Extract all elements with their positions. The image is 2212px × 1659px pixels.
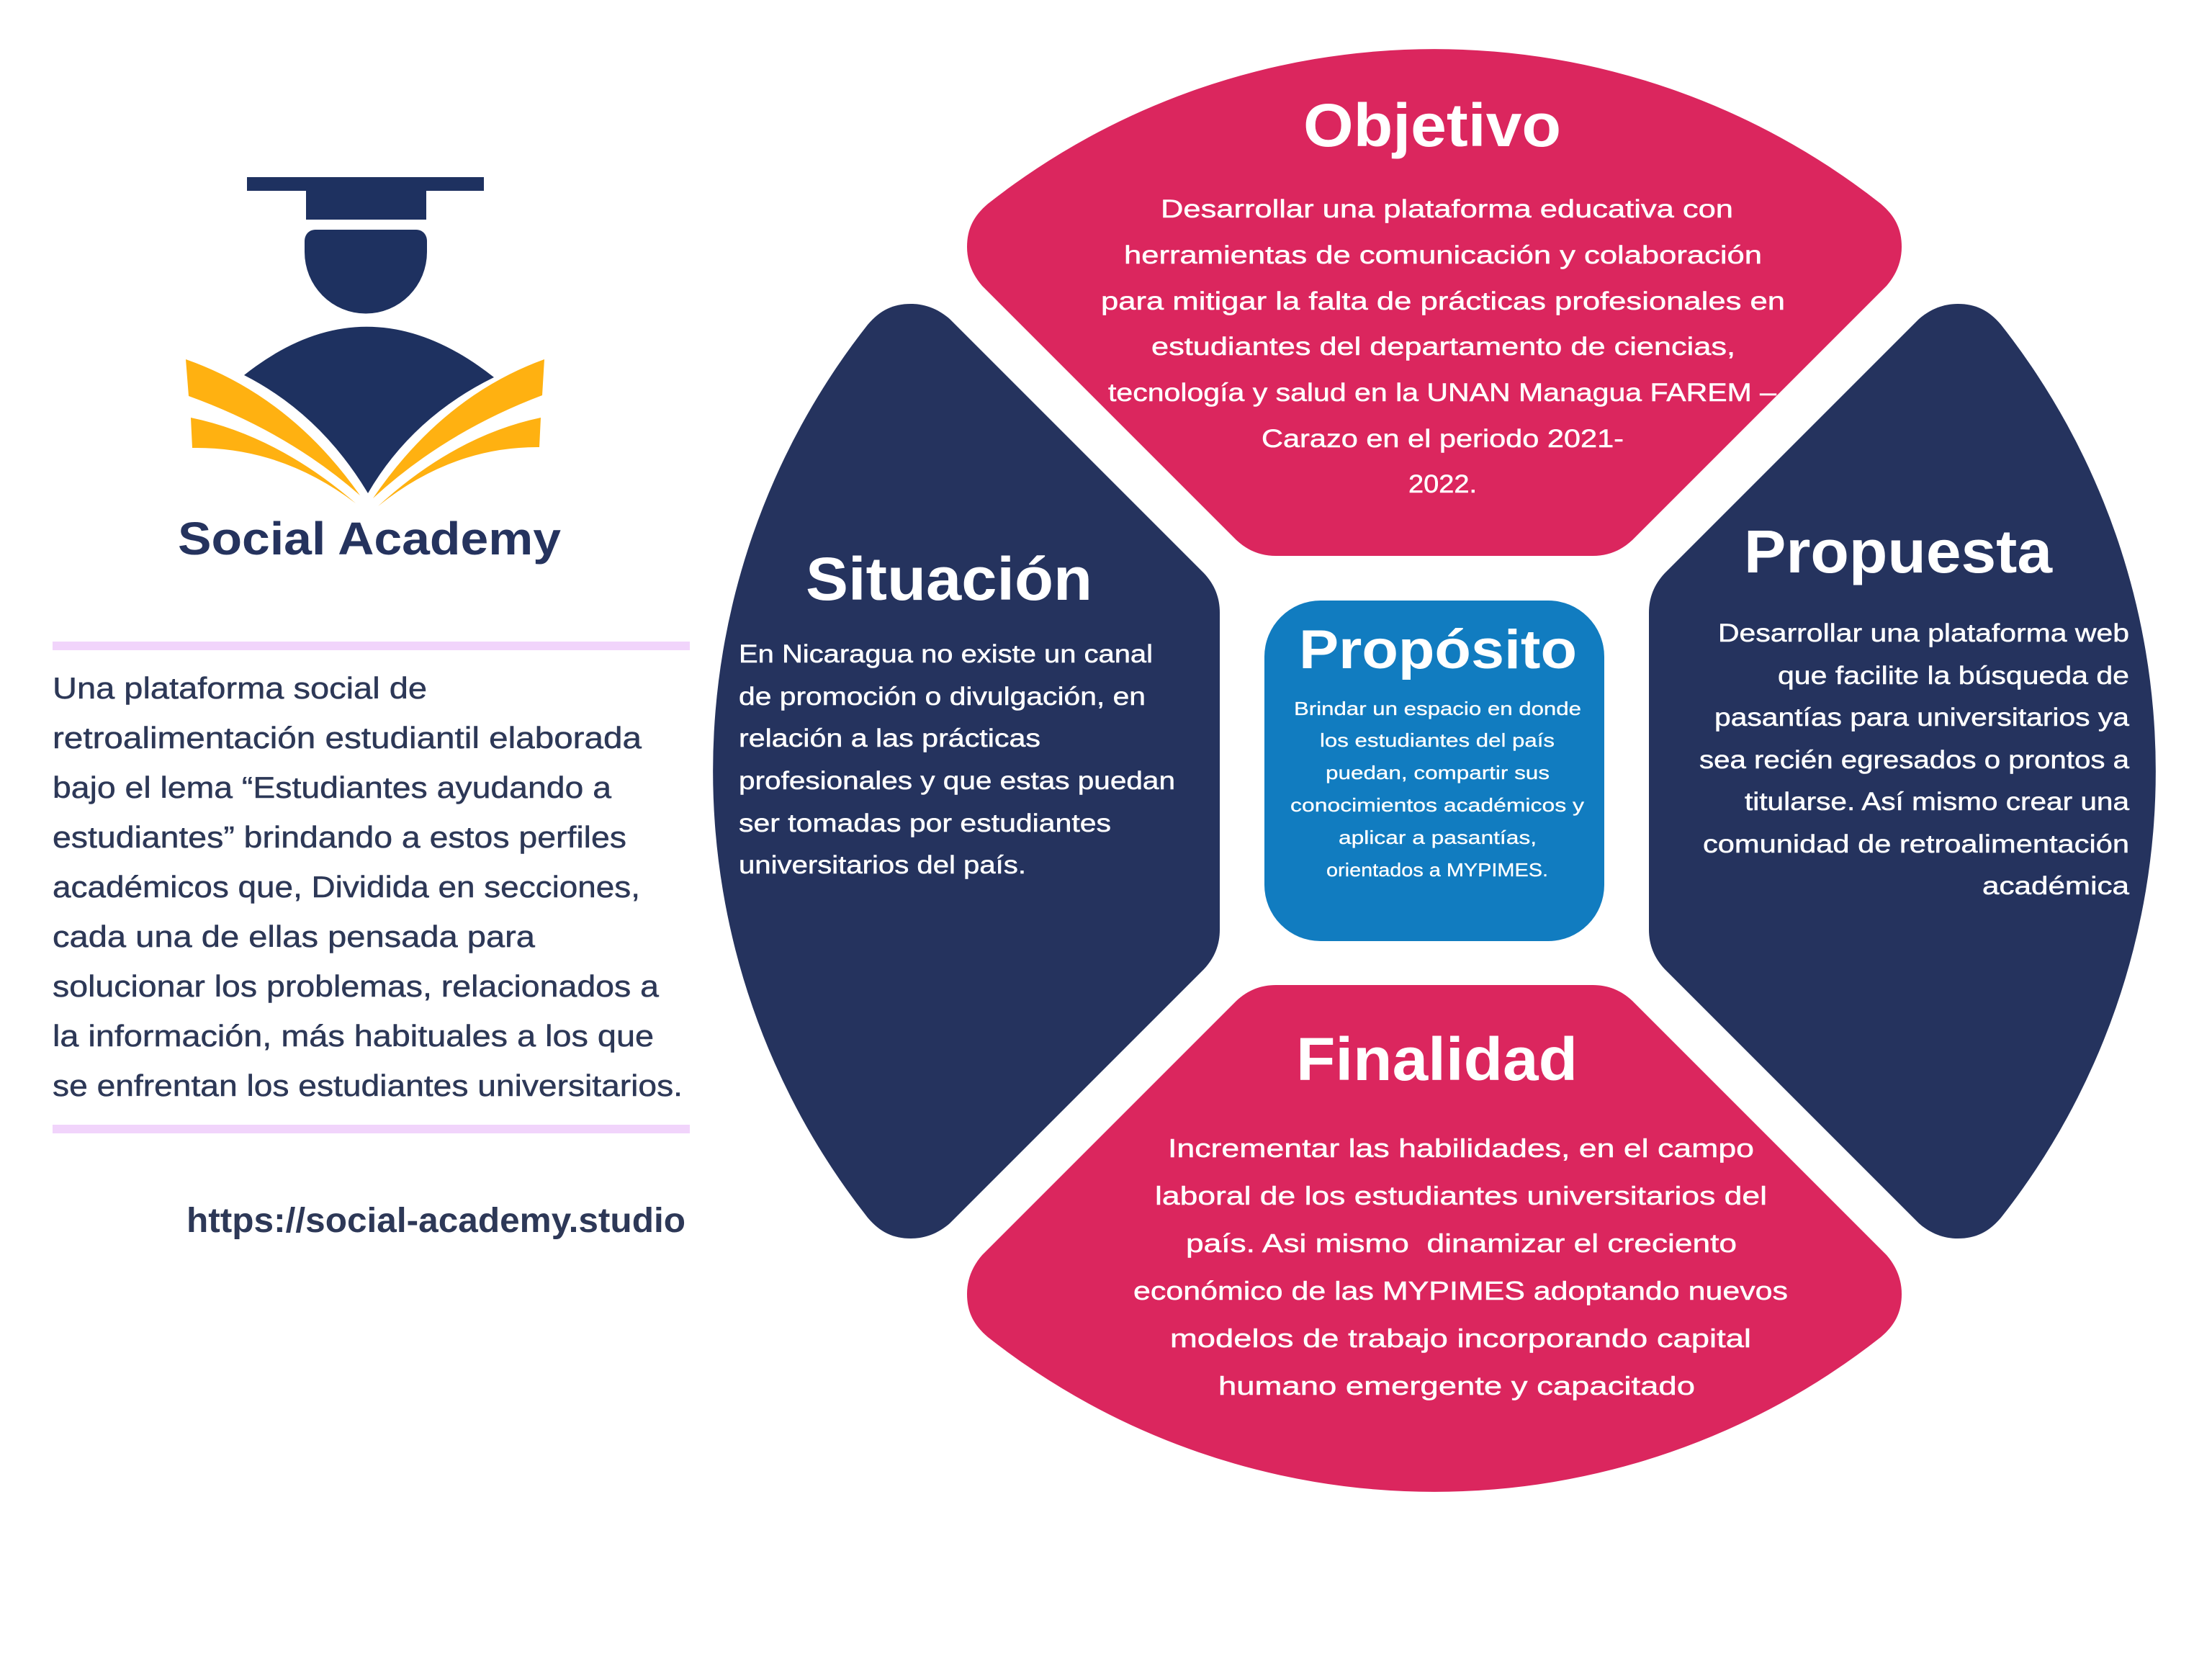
text: Propuesta body: académica — [1982, 872, 2130, 900]
text: Finalidad body: modelos de trabajo incorporando capital — [1170, 1323, 1751, 1353]
text: Objetivo body: tecnología y salud en la UNAN Managua FAREM – — [1108, 379, 1777, 407]
text: Propósito body: orientados a MYPIMES. — [1326, 859, 1548, 881]
text: Finalidad body: económico de las MYPIMES adoptando nuevos — [1133, 1276, 1788, 1305]
text: Propuesta body: Desarrollar una plataforma web — [1718, 619, 2129, 647]
text: Propósito body: aplicar a pasantías, — [1339, 827, 1537, 848]
description text: retroalimentación estudiantil elaborada — [53, 721, 642, 755]
website url: https://social-academy.studio — [186, 1202, 685, 1240]
text: Objetivo body: herramientas de comunicación y colaboración — [1124, 241, 1762, 269]
heading: Situación: Situación — [806, 545, 1092, 613]
text: Finalidad body: Incrementar las habilidades, en el campo — [1168, 1133, 1754, 1163]
icon: graduate with open book — [186, 177, 544, 506]
heading: Finalidad: Finalidad — [1296, 1025, 1578, 1093]
text: Situación body: ser tomadas por estudiantes — [739, 809, 1111, 837]
heading: Propuesta: Propuesta — [1744, 518, 2053, 585]
text: Situación body: En Nicaragua no existe un canal — [739, 640, 1153, 668]
logo: Social Academy — [178, 177, 561, 565]
text: Situación body: profesionales y que estas puedan — [739, 767, 1175, 795]
panel: description — [53, 642, 690, 1133]
description text: cada una de ellas pensada para — [53, 920, 536, 953]
description text: académicos que, Dividida en secciones, — [53, 870, 640, 904]
text: Finalidad body: país. Asi mismo dinamizar el creciento — [1186, 1228, 1737, 1258]
text: Propuesta body: que facilite la búsqueda de — [1778, 662, 2129, 690]
description text: la información, más habituales a los que — [53, 1019, 654, 1053]
text: Objetivo body: 2022. — [1408, 470, 1477, 498]
description text — [53, 671, 683, 1102]
text: Propuesta body: sea recién egresados o prontos a — [1699, 746, 2130, 774]
text: Propuesta body: titularse. Así mismo crear una — [1745, 788, 2130, 816]
text: Propósito body: los estudiantes del país — [1320, 729, 1555, 751]
text: Propuesta body: comunidad de retroalimentación — [1703, 830, 2129, 858]
heading: Objetivo: Objetivo — [1303, 91, 1561, 159]
text: Propósito body: conocimientos académicos y — [1290, 794, 1584, 816]
text: Propósito body: Brindar un espacio en donde — [1294, 698, 1581, 719]
text: Propuesta body — [1699, 619, 2130, 900]
logo wordmark: Social Academy — [178, 513, 561, 565]
description text: bajo el lema “Estudiantes ayudando a — [53, 770, 612, 804]
panel: Objetivo — [967, 49, 1902, 556]
panel: Propuesta — [1649, 304, 2156, 1238]
description text: Una plataforma social de — [53, 671, 427, 705]
description text: estudiantes” brindando a estos perfiles — [53, 820, 626, 854]
text: Propósito body — [1290, 698, 1584, 881]
description text: solucionar los problemas, relacionados a — [53, 969, 660, 1003]
description text: se enfrentan los estudiantes universitarios. — [53, 1069, 683, 1102]
text: Situación body: universitarios del país. — [739, 851, 1026, 879]
text: Situación body: relación a las prácticas — [739, 724, 1040, 752]
text: Finalidad body: humano emergente y capacitado — [1218, 1371, 1695, 1401]
text: Situación body: de promoción o divulgación, en — [739, 683, 1146, 711]
heading: Propósito: Propósito — [1299, 619, 1577, 680]
text: Objetivo body — [1101, 195, 1785, 498]
text: Situación body — [739, 640, 1175, 879]
text: Objetivo body: Carazo en el periodo 2021- — [1262, 425, 1624, 453]
panel: Finalidad — [967, 985, 1902, 1492]
text: Propuesta body: pasantías para universitarios ya — [1714, 703, 2130, 732]
text: Objetivo body: Desarrollar una plataforma educativa con — [1161, 195, 1733, 223]
text: Propósito body: puedan, compartir sus — [1326, 762, 1550, 783]
text: Objetivo body: estudiantes del departamento de ciencias, — [1151, 333, 1735, 361]
text: Objetivo body: para mitigar la falta de prácticas profesionales en — [1101, 287, 1785, 315]
panel: Propósito — [1264, 601, 1604, 941]
text: Finalidad body — [1133, 1133, 1788, 1401]
text: Finalidad body: laboral de los estudiantes universitarios del — [1155, 1181, 1767, 1210]
panel: Situación — [713, 304, 1220, 1238]
